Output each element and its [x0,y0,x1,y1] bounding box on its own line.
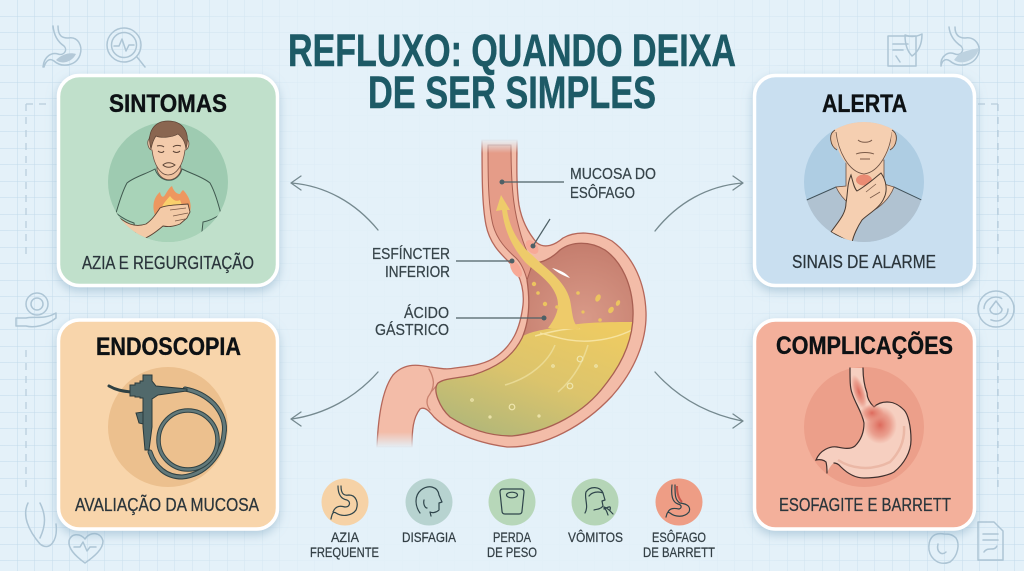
illustration: throat pain [804,122,924,242]
symptom: vômitos: VÔMITOS [568,529,623,545]
stomach wall [377,140,646,447]
label: mucosa do esôfago: ESÔFAGO [570,183,635,202]
reflux arrow [496,195,582,330]
illustration: man with heartburn [108,121,228,250]
decorative icons, right middle [978,291,1014,327]
caption: esofagite e barrett: ESOFAGITE E BARRETT [779,495,951,515]
symptom: esôfago de barrett [643,478,715,560]
pylorus and duodenum [427,369,439,410]
arrow: to sintomas [291,176,378,230]
central stomach diagram [373,139,646,448]
title: REFLUXO: QUANDO DEIXA [288,25,736,76]
label: ácido gástrico: GÁSTRICO [375,320,449,339]
title: DE SER SIMPLES [368,67,656,118]
symptom: azia frequente: AZIA [331,529,360,545]
decorative icons, top right [888,27,979,66]
esophagus lumen [488,145,533,280]
heading: complicações: COMPLICAÇÕES [776,330,953,360]
label: ácido gástrico: ÁCIDO [404,303,449,322]
caption: sinais de alarme: SINAIS DE ALARME [792,252,936,272]
lower sphincter [508,238,541,279]
heading: alerta: ALERTA [822,90,907,118]
acid droplets [532,282,621,322]
heading: sintomas: SINTOMAS [109,90,227,118]
decorative icons, bottom right [929,522,1003,563]
stomach lumen [436,244,632,436]
panel: complicações [754,320,974,529]
arrow: to complicações [655,372,743,428]
illustration: inflamed stomach [804,367,924,487]
label: esfíncter inferior: INFERIOR [385,264,450,281]
illustration: endoscope [108,367,228,487]
fade at esophagus top [478,139,522,153]
symptom: disfagia: DISFAGIA [402,529,457,545]
fade at duodenum bottom [373,432,417,448]
panel: sintomas [58,76,278,286]
caption: avaliação da mucosa: AVALIAÇÃO DA MUCOSA [75,494,259,515]
heading: endoscopia: ENDOSCOPIA [96,333,241,361]
label: esfíncter inferior: ESFÍNCTER [372,244,450,263]
symptom: vômitos [568,478,623,545]
decorative icons, bottom left [26,503,103,563]
symptom: perda de peso: DE PESO [487,544,537,560]
arrow: to alerta [655,176,743,231]
symptom: azia frequente [310,478,379,560]
symptom: esôfago de barrett: ESÔFAGO [652,529,706,545]
arrow: to endoscopia [291,372,378,426]
symptom: disfagia [402,478,457,545]
decorative icons, left middle [16,293,56,327]
symptom: esôfago de barrett: DE BARRETT [643,544,715,560]
label: ácido gástrico [375,303,546,339]
decorative icons, top left [43,26,145,67]
symptom: perda de peso [487,478,537,560]
label: esfíncter inferior [372,244,514,281]
label: mucosa do esôfago [500,166,656,248]
caption: azia e regurgitação: AZIA E REGURGITAÇÃO [82,252,254,273]
title [288,25,736,118]
panel: alerta [754,76,974,286]
symptom: perda de peso: PERDA [493,529,532,545]
liquid bubbles [471,356,597,418]
label: mucosa do esôfago: MUCOSA DO [570,166,656,183]
symptom: azia frequente: FREQUENTE [310,544,379,560]
panel: endoscopia [58,320,278,529]
